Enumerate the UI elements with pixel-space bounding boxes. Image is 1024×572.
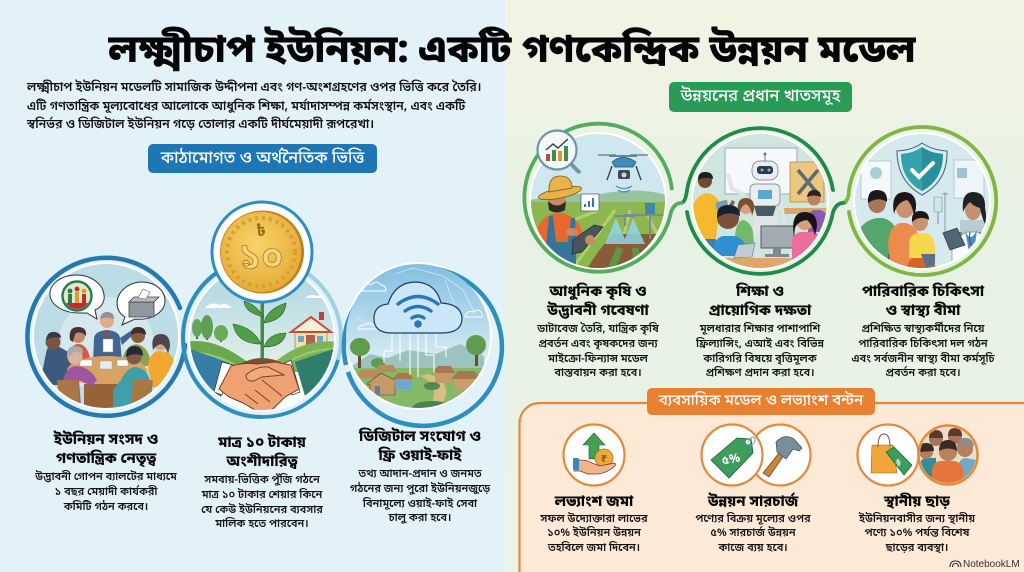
- circle: digital connectivity: [340, 260, 502, 426]
- text: education: মূলধারার শিক্ষার পাশাপাশি: [700, 323, 820, 337]
- intro text: স্বনির্ভর ও ডিজিটাল ইউনিয়ন গড়ে তোলার একটি দীর্ঘমেয়াদী রূপরেখা।: [27, 118, 374, 134]
- title: লক্ষ্মীচাপ ইউনিয়ন: একটি গণকেন্দ্রিক উন্নয়ন মডেল: [108, 27, 916, 78]
- text: education: ফ্রিল্যান্সিং, এআই এবং বিভিন্ন: [696, 338, 824, 352]
- text: digital connectivity: বিনামূল্যে ওয়াই-ফাই সেবা: [363, 498, 477, 512]
- text: local discount: ইউনিয়নবাসীর জন্য স্থানীয়: [859, 512, 975, 526]
- icon: tag and hammer: [702, 424, 810, 486]
- text: share partnership: মাত্র ১০ টাকার শেয়ার কিনে: [202, 489, 322, 503]
- text: digital connectivity: ফ্রি ওয়াই-ফাই: [378, 446, 462, 466]
- text: health: [851, 282, 995, 381]
- text: education: প্রায়োগিক দক্ষতা: [709, 302, 811, 322]
- icon: tag and hammer: ৫%: [721, 451, 741, 469]
- text: dividend: ১০% ইউনিয়ন উন্নয়ন: [547, 527, 641, 541]
- text: agriculture: [537, 282, 659, 381]
- text: surcharge: কাজে ব্যয় হবে।: [718, 542, 788, 556]
- text: agriculture: আধুনিক কৃষি ও: [549, 283, 647, 303]
- text: local discount: [858, 492, 976, 556]
- text: education: শিক্ষা ও: [736, 283, 784, 303]
- heading: foundation: কাঠামোগত ও অর্থনৈতিক ভিত্তি: [161, 148, 364, 170]
- text: agriculture: বাস্তবায়ন করা হবে।: [554, 367, 642, 381]
- text: share partnership: মাত্র ১০ টাকায়: [218, 434, 306, 454]
- heading: foundation: [148, 144, 377, 173]
- icon: ten taka coin: [212, 202, 312, 302]
- icon: ten taka coin: ১০: [239, 236, 283, 284]
- right half background: [505, 0, 1024, 572]
- heading: business model: [647, 388, 875, 415]
- heading: business model: ব্যবসায়িক মডেল ও লভ্যাংশ বন্টন: [659, 392, 863, 412]
- text: union council: কমিটি গঠন করবে।: [64, 501, 148, 515]
- circle: share partnership: [183, 259, 341, 417]
- text: dividend: সফল উদ্যোক্তারা লাভের: [540, 512, 648, 526]
- intro text: [26, 80, 482, 134]
- text: health: প্রবর্তন করা হবে।: [885, 367, 961, 381]
- icon: dividend deposit: [564, 424, 624, 486]
- text: education: কারিগরি বিষয়ে বৃত্তিমূলক: [703, 353, 817, 367]
- text: local discount: স্থানীয় ছাড়: [884, 493, 950, 513]
- text: health: ও স্বাস্থ্য বীমা: [886, 302, 960, 322]
- text: union council: [35, 430, 177, 515]
- text: share partnership: মালিক হতে পারবেন।: [215, 518, 309, 532]
- circle: agriculture: [524, 124, 684, 272]
- text: education: [696, 282, 824, 381]
- text: share partnership: [201, 434, 323, 532]
- icon: shopping and people: [858, 424, 978, 486]
- text: agriculture: মাইক্রো-ফিন্যান্স মডেল: [548, 353, 648, 367]
- circle: education: [684, 128, 846, 274]
- text: share partnership: সমবায়-ভিত্তিক পুঁজি গঠনে: [204, 474, 320, 488]
- text: union council: ১ বছর মেয়াদী কার্যকরী: [55, 486, 157, 500]
- text: surcharge: ৫% সারচার্জ উন্নয়ন: [710, 527, 796, 541]
- text: union council: গণতান্ত্রিক নেতৃত্ব: [56, 450, 156, 470]
- icon: dividend deposit: ₹: [601, 453, 608, 467]
- text: share partnership: যে কেউ ইউনিয়নের ব্যবসার: [201, 504, 323, 518]
- icon: notebook logo: [950, 561, 961, 567]
- icon: ten taka coin: ৳: [256, 221, 266, 243]
- text: agriculture: প্রবর্তন এবং কৃষকদের জন্য: [538, 338, 658, 352]
- text: digital connectivity: গঠনের জন্য পুরো ইউনিয়নজুড়ে: [350, 483, 490, 497]
- text: dividend: তহবিলে জমা দিবেন।: [548, 542, 640, 556]
- text: local discount: ছাড়ের ব্যবস্থা।: [886, 542, 948, 556]
- heading: sectors: উন্নয়নের প্রধান খাতসমূহ: [681, 86, 840, 108]
- text: share partnership: অংশীদারিত্ব: [226, 452, 298, 472]
- icon: shopping and people: %: [892, 458, 904, 469]
- text: dividend: লভ্যাংশ জমা: [555, 493, 633, 513]
- text: agriculture: ডাটাবেজ তৈরি, যান্ত্রিক কৃষি: [537, 323, 659, 337]
- text: digital connectivity: ডিজিটাল সংযোগ ও: [359, 428, 481, 448]
- text: digital connectivity: [350, 428, 490, 526]
- brand label: NotebookLM: [963, 559, 1020, 570]
- text: surcharge: পণ্যের বিক্রয় মূল্যের ওপর: [695, 512, 811, 526]
- panel: business model: [520, 403, 1024, 572]
- text: dividend: [540, 493, 648, 556]
- intro text: লক্ষ্মীচাপ ইউনিয়ন মডেলটি সামাজিক উদ্দীপনা এবং গণ-অংশগ্রহণের ওপর ভিত্তি করে তৈরি।: [27, 81, 482, 97]
- heading: sectors: [669, 82, 852, 112]
- circle: health: [846, 127, 996, 275]
- text: agriculture: উদ্ভাবনী গবেষণা: [547, 302, 649, 322]
- text: digital connectivity: চালু করা হবে।: [389, 512, 451, 526]
- text: union council: উদ্ভাবনী গোপন ব্যালটের মাধ্যমে: [35, 471, 177, 485]
- text: education: প্রশিক্ষণ প্রদান করা হবে।: [706, 367, 814, 381]
- text: surcharge: উন্নয়ন সারচার্জ: [708, 493, 798, 513]
- intro text: এটি গণতান্ত্রিক মূল্যবোধের আলোকে আধুনিক শিক্ষা, মর্যাদাসম্পন্ন কর্মসংস্থান, এবং একটি: [27, 100, 465, 116]
- text: local discount: পণ্যে ১০% পর্যন্ত বিশেষ: [865, 527, 969, 541]
- circle: union council: [27, 258, 185, 416]
- text: digital connectivity: তথ্য আদান-প্রদান ও জনমত: [358, 468, 482, 482]
- text: health: এবং সর্বজনীন স্বাস্থ্য বীমা কর্মসূচি: [851, 353, 995, 367]
- text: health: প্রশিক্ষিত স্বাস্থ্যকর্মীদের নিয়ে: [861, 323, 985, 337]
- text: health: পারিবারিক চিকিৎসা দল গঠন: [858, 338, 988, 352]
- text: health: পারিবারিক চিকিৎসা: [862, 283, 984, 303]
- text: union council: ইউনিয়ন সংসদ ও: [54, 431, 158, 451]
- text: surcharge: [695, 492, 811, 556]
